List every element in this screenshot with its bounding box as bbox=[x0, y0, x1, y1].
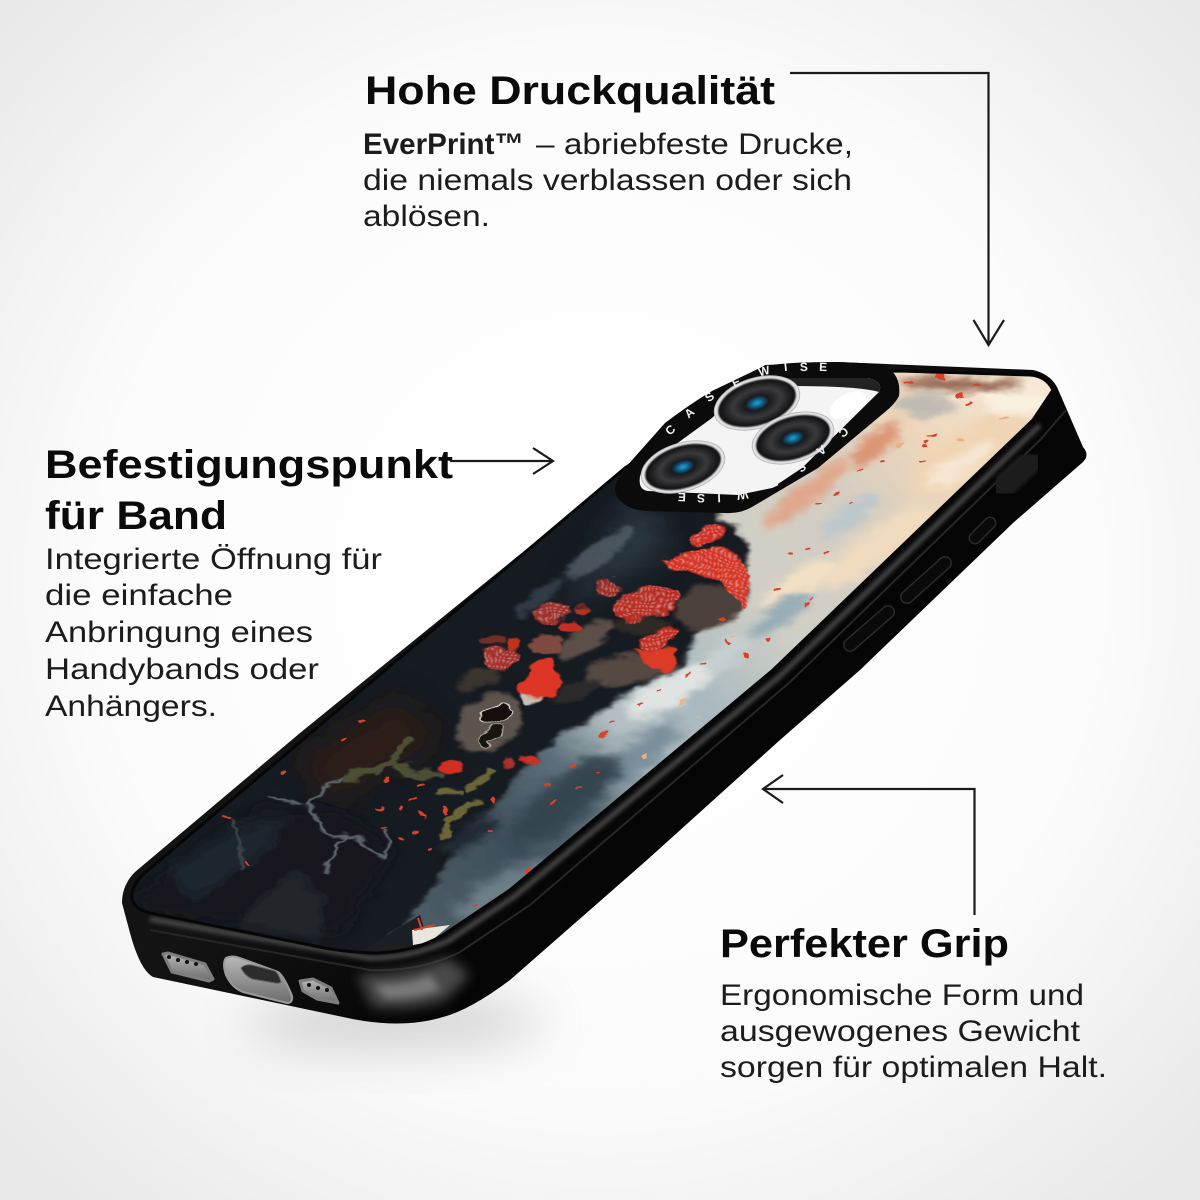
casewise lettering: I bbox=[783, 360, 788, 374]
casewise lettering: C bbox=[835, 424, 851, 441]
body text: Anhängers. bbox=[45, 690, 217, 723]
callout: Befestigungspunkt bbox=[45, 443, 453, 723]
branches bbox=[232, 738, 490, 870]
body text bbox=[45, 543, 382, 723]
body text bbox=[363, 128, 853, 233]
casewise lettering: S bbox=[697, 491, 705, 505]
body text: ausgewogenes Gewicht bbox=[720, 1015, 1081, 1048]
side ridge bbox=[150, 410, 1066, 970]
casewise lettering: W bbox=[757, 363, 772, 379]
arrow: print quality bbox=[790, 73, 1004, 345]
heading: Perfekter Grip bbox=[720, 922, 1009, 966]
body text: sorgen für optimalen Halt. bbox=[720, 1051, 1107, 1084]
arrow: grip bbox=[763, 775, 974, 915]
side buttons bbox=[850, 523, 990, 645]
inner bezel highlight bbox=[150, 425, 1040, 958]
side camera control button bbox=[1004, 462, 1030, 486]
glass reflection bbox=[825, 385, 871, 425]
body text: die niemals verblassen oder sich bbox=[363, 164, 852, 197]
body text: Handybands oder bbox=[45, 653, 319, 686]
lenses bbox=[635, 366, 840, 503]
charging port bbox=[224, 956, 292, 1003]
sky bbox=[386, 372, 1052, 938]
casewise lettering: C bbox=[662, 422, 678, 438]
casewise lettering: A bbox=[682, 405, 698, 421]
heading: Hohe Druckqualität bbox=[365, 69, 775, 113]
casewise lettering: S bbox=[702, 389, 717, 405]
body text bbox=[720, 979, 1107, 1084]
dark upper panel bbox=[570, 502, 674, 602]
heading: Befestigungspunkt bbox=[45, 443, 453, 487]
tent shape at the lower edge bbox=[379, 915, 424, 952]
left speaker bbox=[163, 953, 213, 981]
red leaves and flecks bbox=[225, 377, 979, 915]
casewise lettering: E bbox=[767, 475, 780, 491]
clouds bbox=[436, 377, 1053, 931]
glass shade bbox=[770, 378, 880, 392]
printed artwork bbox=[134, 372, 1052, 952]
body text: EverPrint™ bbox=[363, 128, 524, 161]
case body bbox=[122, 362, 1086, 1024]
casewise lettering: S bbox=[800, 360, 808, 374]
casewise lettering: E bbox=[730, 374, 743, 390]
mushroom caps bbox=[440, 519, 750, 775]
camera glass bbox=[640, 378, 880, 495]
bottom ports bbox=[163, 953, 338, 1003]
bumper corner highlight bbox=[358, 958, 470, 1008]
phone shadow bbox=[245, 998, 545, 1046]
casewise lettering: S bbox=[794, 459, 809, 475]
camera bumper bbox=[615, 362, 899, 513]
skull bbox=[453, 690, 524, 754]
body text: Integrierte Öffnung für bbox=[45, 543, 382, 576]
camera island bbox=[615, 360, 899, 513]
body text: die einfache bbox=[45, 579, 233, 612]
casewise lettering: E bbox=[678, 490, 686, 504]
body text: – abriebfeste Drucke, bbox=[536, 128, 853, 161]
arrow: strap attachment bbox=[450, 448, 553, 474]
mushroom stems and gills bbox=[454, 518, 745, 713]
dark lower-left ground bbox=[130, 810, 395, 935]
body text: Ergonomische Form und bbox=[720, 979, 1084, 1012]
body text: ablösen. bbox=[363, 200, 490, 233]
casewise lettering: A bbox=[813, 442, 829, 459]
heading: für Band bbox=[45, 494, 227, 538]
body text: Anbringung eines bbox=[45, 616, 313, 649]
phone case bbox=[100, 350, 1100, 1024]
casewise lettering: I bbox=[717, 491, 721, 505]
casewise lettering bbox=[662, 360, 851, 505]
glass rim around artwork bbox=[132, 371, 1053, 953]
heading bbox=[45, 443, 453, 538]
casewise lettering: E bbox=[819, 360, 827, 374]
callout: Perfekter Grip bbox=[720, 922, 1107, 1084]
casewise lettering: W bbox=[735, 487, 749, 503]
callout: Hohe Druckqualität bbox=[363, 69, 853, 233]
right speaker bbox=[300, 979, 338, 1003]
